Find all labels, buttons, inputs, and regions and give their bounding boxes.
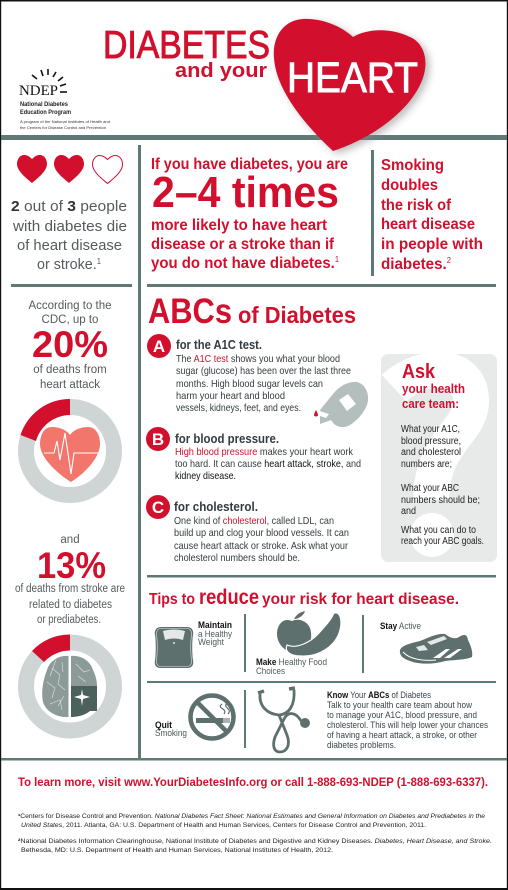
logo: NDEP: the Centers for Disease Control and Prevention xyxy=(20,125,106,130)
text: quit smoking: Quit xyxy=(155,720,173,731)
text: of deaths from heart attack: of deaths from xyxy=(33,364,107,376)
panel: smoking doubles: diabetes. xyxy=(381,256,450,273)
panel: 13 percent stroke xyxy=(15,534,125,730)
references: Bethesda, MD: U.S. Department of Health and Human Services, National Institutes of Health, 2012. xyxy=(21,847,333,854)
text: cholesterol description: cholesterol numbers should be. xyxy=(174,553,300,564)
text: blood pressure description: kidney disease. xyxy=(175,471,236,482)
panel: smoking doubles: Smoking xyxy=(381,157,444,174)
text: questions: and xyxy=(401,506,416,517)
text: 2 out of 3 people: 2 out of 3 people xyxy=(11,198,127,215)
icon: three hearts xyxy=(17,155,122,184)
number: 13%: 13% xyxy=(37,545,106,586)
logo: NDEP: Education Program xyxy=(20,110,71,116)
text: quit smoking xyxy=(155,720,187,739)
text: according to the CDC: CDC, up to xyxy=(42,314,98,326)
text: questions: numbers should be; xyxy=(401,495,480,506)
tip: know your ABCs: diabetes problems. xyxy=(327,740,396,751)
panel: 2–4 times: If you have diabetes, you are xyxy=(151,156,348,173)
text: blood pressure description xyxy=(175,447,361,482)
text: of deaths from stroke: of deaths from stroke are xyxy=(15,583,125,595)
logo: NDEP xyxy=(19,69,110,130)
text: cholesterol description: cause heart attack or stroke. Ask what your xyxy=(174,541,348,552)
icon: large heart with HEART title: HEART xyxy=(287,54,418,102)
panel: smoking doubles: the risk of xyxy=(381,197,452,214)
text: according to the CDC xyxy=(28,300,112,326)
text: of deaths from heart attack: heart attack xyxy=(40,379,100,391)
heading: Ask: Ask xyxy=(402,361,436,383)
references: ²National Diabetes Information Clearinghouse, National Institute of Diabetes and Digestive and Kidney Diseases. Diabetes, Heart Disease, and Stroke. xyxy=(18,838,492,845)
icon: large heart with HEART title xyxy=(274,19,429,154)
panel: 2–4 times: 1 xyxy=(335,255,340,264)
references: ¹Centers for Disease Control and Prevention. National Diabetes Fact Sheet: National Estimates and General Information on Diabetes and Prediabetes in the xyxy=(18,813,485,820)
panel: smoking doubles: 2 xyxy=(447,256,452,265)
tip: stay active xyxy=(380,621,472,664)
text: questions: blood pressure, xyxy=(401,436,461,447)
text: questions: What your A1C, xyxy=(401,424,460,435)
references: United States , 2011. Atlanta, GA: U.S. Department of Health and Human Services, Centers for Disease Control and Prevention, 2011. xyxy=(21,822,426,829)
text: quit smoking: Smoking xyxy=(155,728,187,739)
tip: know your ABCs: Know Your ABCs of Diabetes xyxy=(327,690,431,701)
panel: 2–4 times: 2–4 times xyxy=(152,168,339,217)
panel: 2–4 times: you do not have diabetes. xyxy=(151,255,347,272)
panel: Ask your health care team xyxy=(381,354,497,562)
subheading: for the A1C test: for the A1C test. xyxy=(176,337,262,352)
heading: tips to reduce your risk: reduce xyxy=(199,586,259,609)
text: maintain a healthy weight: Weight xyxy=(198,637,224,648)
text: according to the CDC: According to the xyxy=(28,300,112,312)
heading: Ask: your health xyxy=(402,381,465,396)
panel: 2–4 times xyxy=(151,156,348,272)
text: of deaths from stroke xyxy=(15,583,125,626)
heading: tips to reduce your risk: your risk for heart disease. xyxy=(262,591,459,608)
section: C for cholesterol xyxy=(146,495,349,564)
section: A for the A1C test xyxy=(147,334,368,427)
text: A1C description: harm your heart and blood xyxy=(176,391,285,402)
panel: smoking doubles: in people with xyxy=(381,236,483,253)
tip: maintain a healthy weight xyxy=(155,620,232,668)
title: Diabetes and your: and your xyxy=(175,60,267,82)
heading: tips to reduce your risk: Tips to xyxy=(149,591,195,608)
icon: letter C: C xyxy=(152,498,164,517)
text: questions: numbers are; xyxy=(401,459,452,470)
icon: letter A: A xyxy=(153,337,165,356)
icon: letter A xyxy=(147,334,171,358)
tip: know your ABCs: to manage your A1C, blood pressure, and xyxy=(327,710,477,721)
chart: donut 13 percent xyxy=(26,634,114,730)
panel: smoking doubles: doubles xyxy=(381,177,438,194)
icon: large white question mark xyxy=(394,370,471,557)
panel: 2–4 times: more likely to have heart xyxy=(151,217,328,234)
text: of deaths from stroke: related to diabetes xyxy=(29,599,112,611)
text: 2 out of 3 people: with diabetes die xyxy=(12,218,127,235)
panel: 20 percent heart attack xyxy=(20,300,114,495)
subheading: for blood pressure: for blood pressure. xyxy=(175,431,279,446)
icon: letter C xyxy=(146,495,170,519)
logo: NDEP: NDEP xyxy=(19,83,58,99)
icon: heart with ECG line xyxy=(40,427,100,482)
subheading: for cholesterol: for cholesterol. xyxy=(174,499,258,514)
text: make healthy food choices: Choices xyxy=(256,666,285,677)
panel: smoking doubles: heart disease xyxy=(381,216,475,233)
text: maintain a healthy weight xyxy=(198,620,232,648)
text: of deaths from stroke: or prediabetes. xyxy=(37,614,101,626)
number: 20%: 20% xyxy=(32,324,108,365)
text: questions xyxy=(401,424,484,547)
heading: ABCs of Diabetes: of Diabetes xyxy=(238,302,356,328)
title: Diabetes and your xyxy=(103,24,270,82)
icon: running shoe xyxy=(400,634,472,664)
text: of deaths from heart attack xyxy=(33,364,107,391)
heading: tips to reduce your risk xyxy=(149,586,459,609)
callout: to learn more: To learn more, visit www.YourDiabetesInfo.org or call 1-888-693-NDEP (1-888-693-6337). xyxy=(18,775,488,789)
text: blood pressure description: High blood pressure makes your heart work xyxy=(175,447,354,458)
text: questions: and cholesterol xyxy=(401,447,461,458)
panel: 2–4 times: disease or a stroke than if xyxy=(151,236,335,253)
text: cholesterol description: build up and clog your blood vessels. It can xyxy=(174,528,349,539)
text: maintain a healthy weight: Maintain xyxy=(198,620,232,631)
icon: blood glucose meter xyxy=(314,382,368,427)
tip: know your ABCs xyxy=(327,690,488,751)
text: and: and xyxy=(60,534,80,546)
text: A1C description xyxy=(176,354,351,414)
icon: no smoking xyxy=(190,696,234,738)
panel: smoking doubles xyxy=(381,157,483,273)
tip: know your ABCs: of having a heart attack, a stroke, or other xyxy=(327,730,477,741)
text: questions: What your ABC xyxy=(401,483,459,494)
text: A1C description: sugar (glucose) has been over the last three xyxy=(176,366,351,377)
heading: Ask xyxy=(402,361,465,411)
logo: NDEP: A program of the National Institutes of Health and xyxy=(20,119,110,124)
text: make healthy food choices: Make Healthy Food xyxy=(256,657,327,668)
text: A1C description: months. High blood sugar levels can xyxy=(176,379,323,390)
icon: apple and banana xyxy=(277,611,341,656)
text: cholesterol description: One kind of cholesterol, called LDL, can xyxy=(174,516,334,527)
references xyxy=(18,813,492,854)
text: maintain a healthy weight: a Healthy xyxy=(198,629,232,640)
text: 2 out of 3 people xyxy=(11,198,127,273)
title: Diabetes and your: DIABETES xyxy=(103,24,270,67)
text: stay active: Stay Active xyxy=(380,621,421,632)
text: 2 out of 3 people: of heart disease xyxy=(17,237,122,254)
text: 2 out of 3 people: or stroke. xyxy=(37,256,100,273)
section: B for blood pressure xyxy=(146,427,361,482)
heading: ABCs of Diabetes xyxy=(148,292,356,331)
tip: make healthy food choices xyxy=(256,611,341,677)
heading: ABCs of Diabetes: ABCs xyxy=(148,292,232,331)
text: A1C description: The A1C test shows you what your blood xyxy=(176,354,340,365)
icon: stethoscope xyxy=(258,688,310,752)
logo: NDEP: National Diabetes xyxy=(20,102,69,108)
text: questions: reach your ABC goals. xyxy=(401,536,484,547)
icon: letter B: B xyxy=(152,430,164,449)
chart: donut 20 percent xyxy=(20,399,114,495)
text: cholesterol description xyxy=(174,516,349,564)
text: blood pressure description: too hard. It can cause heart attack, stroke, and xyxy=(175,459,361,470)
tip: know your ABCs: Talk to your health care team about how xyxy=(327,700,472,711)
tip: quit smoking xyxy=(155,696,234,739)
icon: brain xyxy=(42,656,97,717)
text: questions: What you can do to xyxy=(401,525,476,536)
text: A1C description: vessels, kidneys, feet, and eyes. xyxy=(176,403,301,414)
text: 2 out of 3 people: 1 xyxy=(97,257,102,266)
icon: letter B xyxy=(146,427,170,451)
icon: scale xyxy=(155,627,193,668)
text: make healthy food choices xyxy=(256,657,327,677)
panel: 2 out of 3 xyxy=(11,155,127,273)
heading: Ask: care team: xyxy=(402,396,459,411)
